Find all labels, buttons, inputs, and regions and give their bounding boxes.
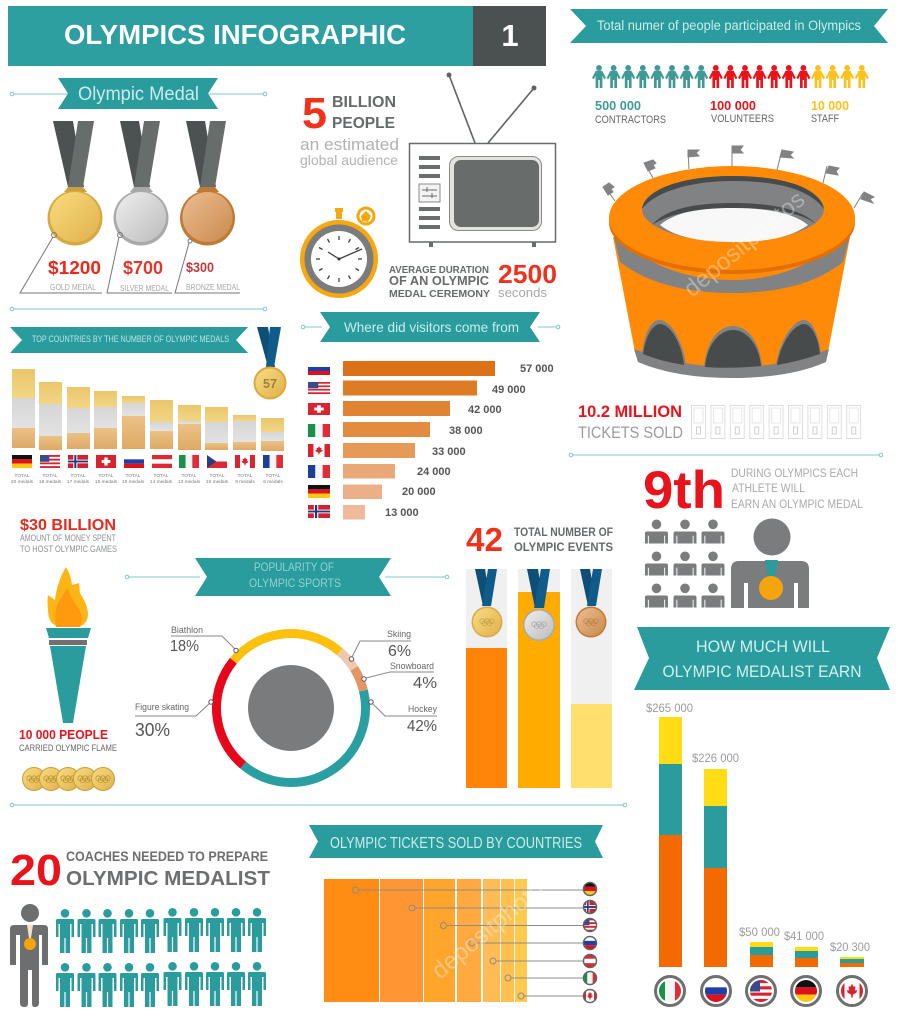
chart: visitor bars: 38 000 [449,425,483,437]
country totals [11,473,283,485]
chart: visitor bars: 42 000 [468,404,502,416]
silver medal: SILVER MEDAL [120,284,169,293]
stat: staff [811,99,849,125]
country totals: 6 medals [263,479,283,485]
banner: top countries [10,327,248,353]
bar: Canada: $20 300 [830,940,870,954]
banner: total people: Total numer of people participated in Olympics [597,18,861,33]
country totals: 14 medals [150,479,173,485]
country totals: 13 medals [178,479,201,485]
banner: medalist earnings: OLYMPIC MEDALIST EARN [662,662,862,681]
bar: Russia: $226 000 [692,751,739,765]
gold medal: GOLD MEDAL [50,283,96,292]
silver medal [107,121,172,293]
pictogram: coaches [56,908,266,1007]
section: popularity of sports [125,558,449,783]
section: tickets by countries [309,825,603,1002]
stat: staff: STAFF [811,113,839,125]
section: total participants [570,9,888,126]
section: 9th athlete [643,461,863,608]
banner: where visitors came from: Where did visitors come from [344,319,519,335]
leader lines [352,887,583,999]
country totals: TOTAL [14,473,30,479]
bar: Russia [692,751,739,967]
bronze column [571,569,612,788]
country totals: 17 medals [67,479,90,485]
country totals: TOTAL [125,473,141,479]
stat: flame carriers: 10 000 PEOPLE [19,727,108,742]
chart: visitor bars: 49 000 [492,384,526,396]
people pictogram row [592,65,869,88]
stat: 20 coaches: OLYMPIC MEDALIST [66,868,270,890]
country totals: 8 medals [235,479,255,485]
gold medal [20,121,102,293]
icon: medal 57: 57 [263,377,277,391]
label: biathlon: 18% [170,638,199,655]
banner: tickets sold by countries: OLYMPIC TICKETS SOLD BY COUNTRIES [330,835,582,852]
section: coaches [10,846,270,1007]
stat: medal ceremony duration: MEDAL CEREMONY [389,288,490,300]
bronze medal: $300 [186,260,214,275]
stat: 20 coaches [10,846,270,895]
chart: ticket share strips [324,879,527,1002]
bar: Germany: $41 000 [784,929,824,943]
title banner [8,6,546,66]
label: skiing: Skiing [387,629,411,640]
label: figure skating: 30% [135,720,170,740]
label: biathlon: Biathlon [171,625,203,636]
silver column [518,569,560,788]
label: snowboard: 4% [413,675,437,692]
label: snowboard: Snowboard [390,661,434,672]
icon: medal winner [731,518,809,608]
label: skiing [349,629,411,661]
stat: volunteers: 100 000 [710,99,756,113]
chart: visitor bars: 20 000 [402,486,436,498]
country totals: TOTAL [181,473,197,479]
text: athlete medal note: ATHLETE WILL [732,481,805,495]
chart: visitor bars [343,361,554,520]
country totals: 15 medals [95,479,118,485]
label: biathlon [170,625,238,655]
stat: flame carriers [19,727,117,753]
bar: Italy: $265 000 [646,701,693,715]
icon: television [410,72,556,247]
title banner: OLYMPICS INFOGRAPHIC [64,19,406,50]
bar: Germany [784,929,824,967]
stat: medal ceremony duration: AVERAGE DURATION [389,264,489,276]
chart: visitor bars: 13 000 [385,507,419,519]
country totals: TOTAL [237,473,253,479]
country totals: 10 medals [206,479,229,485]
stat: volunteers [710,99,774,125]
country totals: 15 medals [122,479,145,485]
stat: 5 billion audience: BILLION [332,94,396,111]
section: total events [466,521,613,788]
banner: total people [570,9,888,43]
silver medal: $700 [123,258,163,278]
stat: 5 billion audience [300,89,399,168]
country totals: TOTAL [153,473,169,479]
banner: medalist earnings [634,627,890,690]
stat: contractors: CONTRACTORS [595,114,666,126]
flag badges [655,976,867,1006]
label: hockey: Hockey [408,704,437,715]
section: top countries by medals [10,327,286,485]
visitor flags [308,363,330,518]
gold column [466,569,507,788]
stat: 42 events [466,521,613,558]
stat: medal ceremony duration [389,259,557,300]
stat: contractors [595,99,666,126]
label: hockey [369,700,437,735]
stat: medal ceremony duration: OF AN OLYMPIC [389,274,489,288]
icon: medalist [10,904,48,1007]
label: figure skating [135,700,213,740]
bronze medal: BRONZE MEDAL [186,283,240,292]
icon: medal 57 [254,327,286,400]
stat: 5 billion audience: 5 [302,89,327,138]
stat: $30 billion: $30 BILLION [20,517,116,534]
banner: popularity: POPULARITY OF [254,560,334,574]
label: figure skating: Figure skating [135,702,189,713]
chart: visitor bars: 33 000 [432,446,466,458]
watermark: depositphotos [427,868,558,985]
flag badges: ticket countries [582,882,598,1002]
bar: USA [739,925,780,967]
label: skiing: 6% [388,643,411,660]
icon: gold coins [22,768,114,790]
stat: $30 billion: AMOUNT OF MONEY SPENT [20,533,116,543]
text: athlete medal note [731,466,863,511]
stat: medal ceremony duration: seconds [498,285,548,300]
bronze medal [175,121,240,293]
banner: popularity [125,558,449,596]
stat: medal ceremony duration: 2500 [498,259,557,289]
icon: ticket row [692,406,861,438]
icon: stadium [603,146,874,378]
stat: flame carriers: CARRIED OLYMPIC FLAME [19,743,117,753]
banner: top countries: TOP COUNTRIES BY THE NUMBER OF OLYMPIC MEDALS [32,334,229,344]
chart: visitor bars: 57 000 [520,363,554,375]
section: visitors [301,312,560,520]
country totals: TOTAL [209,473,225,479]
stat: $30 billion [20,517,117,554]
country totals: 20 medals [11,479,34,485]
country totals: TOTAL [98,473,114,479]
stat: staff: 10 000 [811,99,849,113]
country totals: TOTAL [70,473,86,479]
stat: 9th: 9th [643,461,725,520]
chart: visitor bars: 24 000 [417,466,451,478]
chart: medalist earnings bars [646,701,870,1006]
label: hockey: 42% [407,718,437,735]
stat: 20 coaches: 20 [10,846,62,895]
bar: Canada [830,940,870,967]
country flags row [12,455,283,468]
bar: Italy [646,701,693,967]
stat: 20 coaches: COACHES NEEDED TO PREPARE [66,849,268,864]
country totals: TOTAL [42,473,58,479]
stat: 5 billion audience: an estimated [300,135,399,154]
stat: tickets sold [578,403,861,442]
stat: $30 billion: TO HOST OLYMPIC GAMES [20,544,117,554]
bar: USA: $50 000 [739,925,780,939]
stat: contractors: 500 000 [595,99,641,113]
text: athlete medal note: DURING OLYMPICS EACH [731,466,858,480]
stat: tickets sold: 10.2 MILLION [578,403,682,421]
banner: medalist earnings: HOW MUCH WILL [696,637,830,656]
stat: tickets sold: TICKETS SOLD [578,423,683,442]
watermark [427,186,810,985]
icon: stopwatch [300,208,378,298]
banner: where visitors came from [301,312,560,342]
banner: Olympic Medal: Olympic Medal [78,84,199,105]
banner: tickets sold by countries [309,825,603,858]
stat: volunteers: VOLUNTEERS [711,113,774,125]
banner: popularity: OLYMPIC SPORTS [249,576,341,590]
chart: stacked medal bars [12,369,284,451]
title banner: 1 [501,18,519,53]
banner: Olympic Medal [10,78,267,109]
chart: donut [216,633,365,783]
stat: 5 billion audience: PEOPLE [332,115,395,132]
stat: 42 events: OLYMPIC EVENTS [514,540,613,554]
gold medal: $1200 [48,257,101,278]
country totals: 18 medals [39,479,62,485]
watermark: depositphotos [679,186,810,303]
country totals: TOTAL [265,473,281,479]
stat: 42 events: 42 [466,521,503,558]
text: athlete medal note: EARN AN OLYMPIC MEDAL [731,497,863,511]
section: olympic medal values [10,78,267,293]
icon: small athletes [645,520,724,607]
stat: 5 billion audience: global audience [300,152,398,168]
label: snowboard [362,661,437,692]
icon: torch [46,567,91,723]
stat: 42 events: TOTAL NUMBER OF [514,527,613,539]
